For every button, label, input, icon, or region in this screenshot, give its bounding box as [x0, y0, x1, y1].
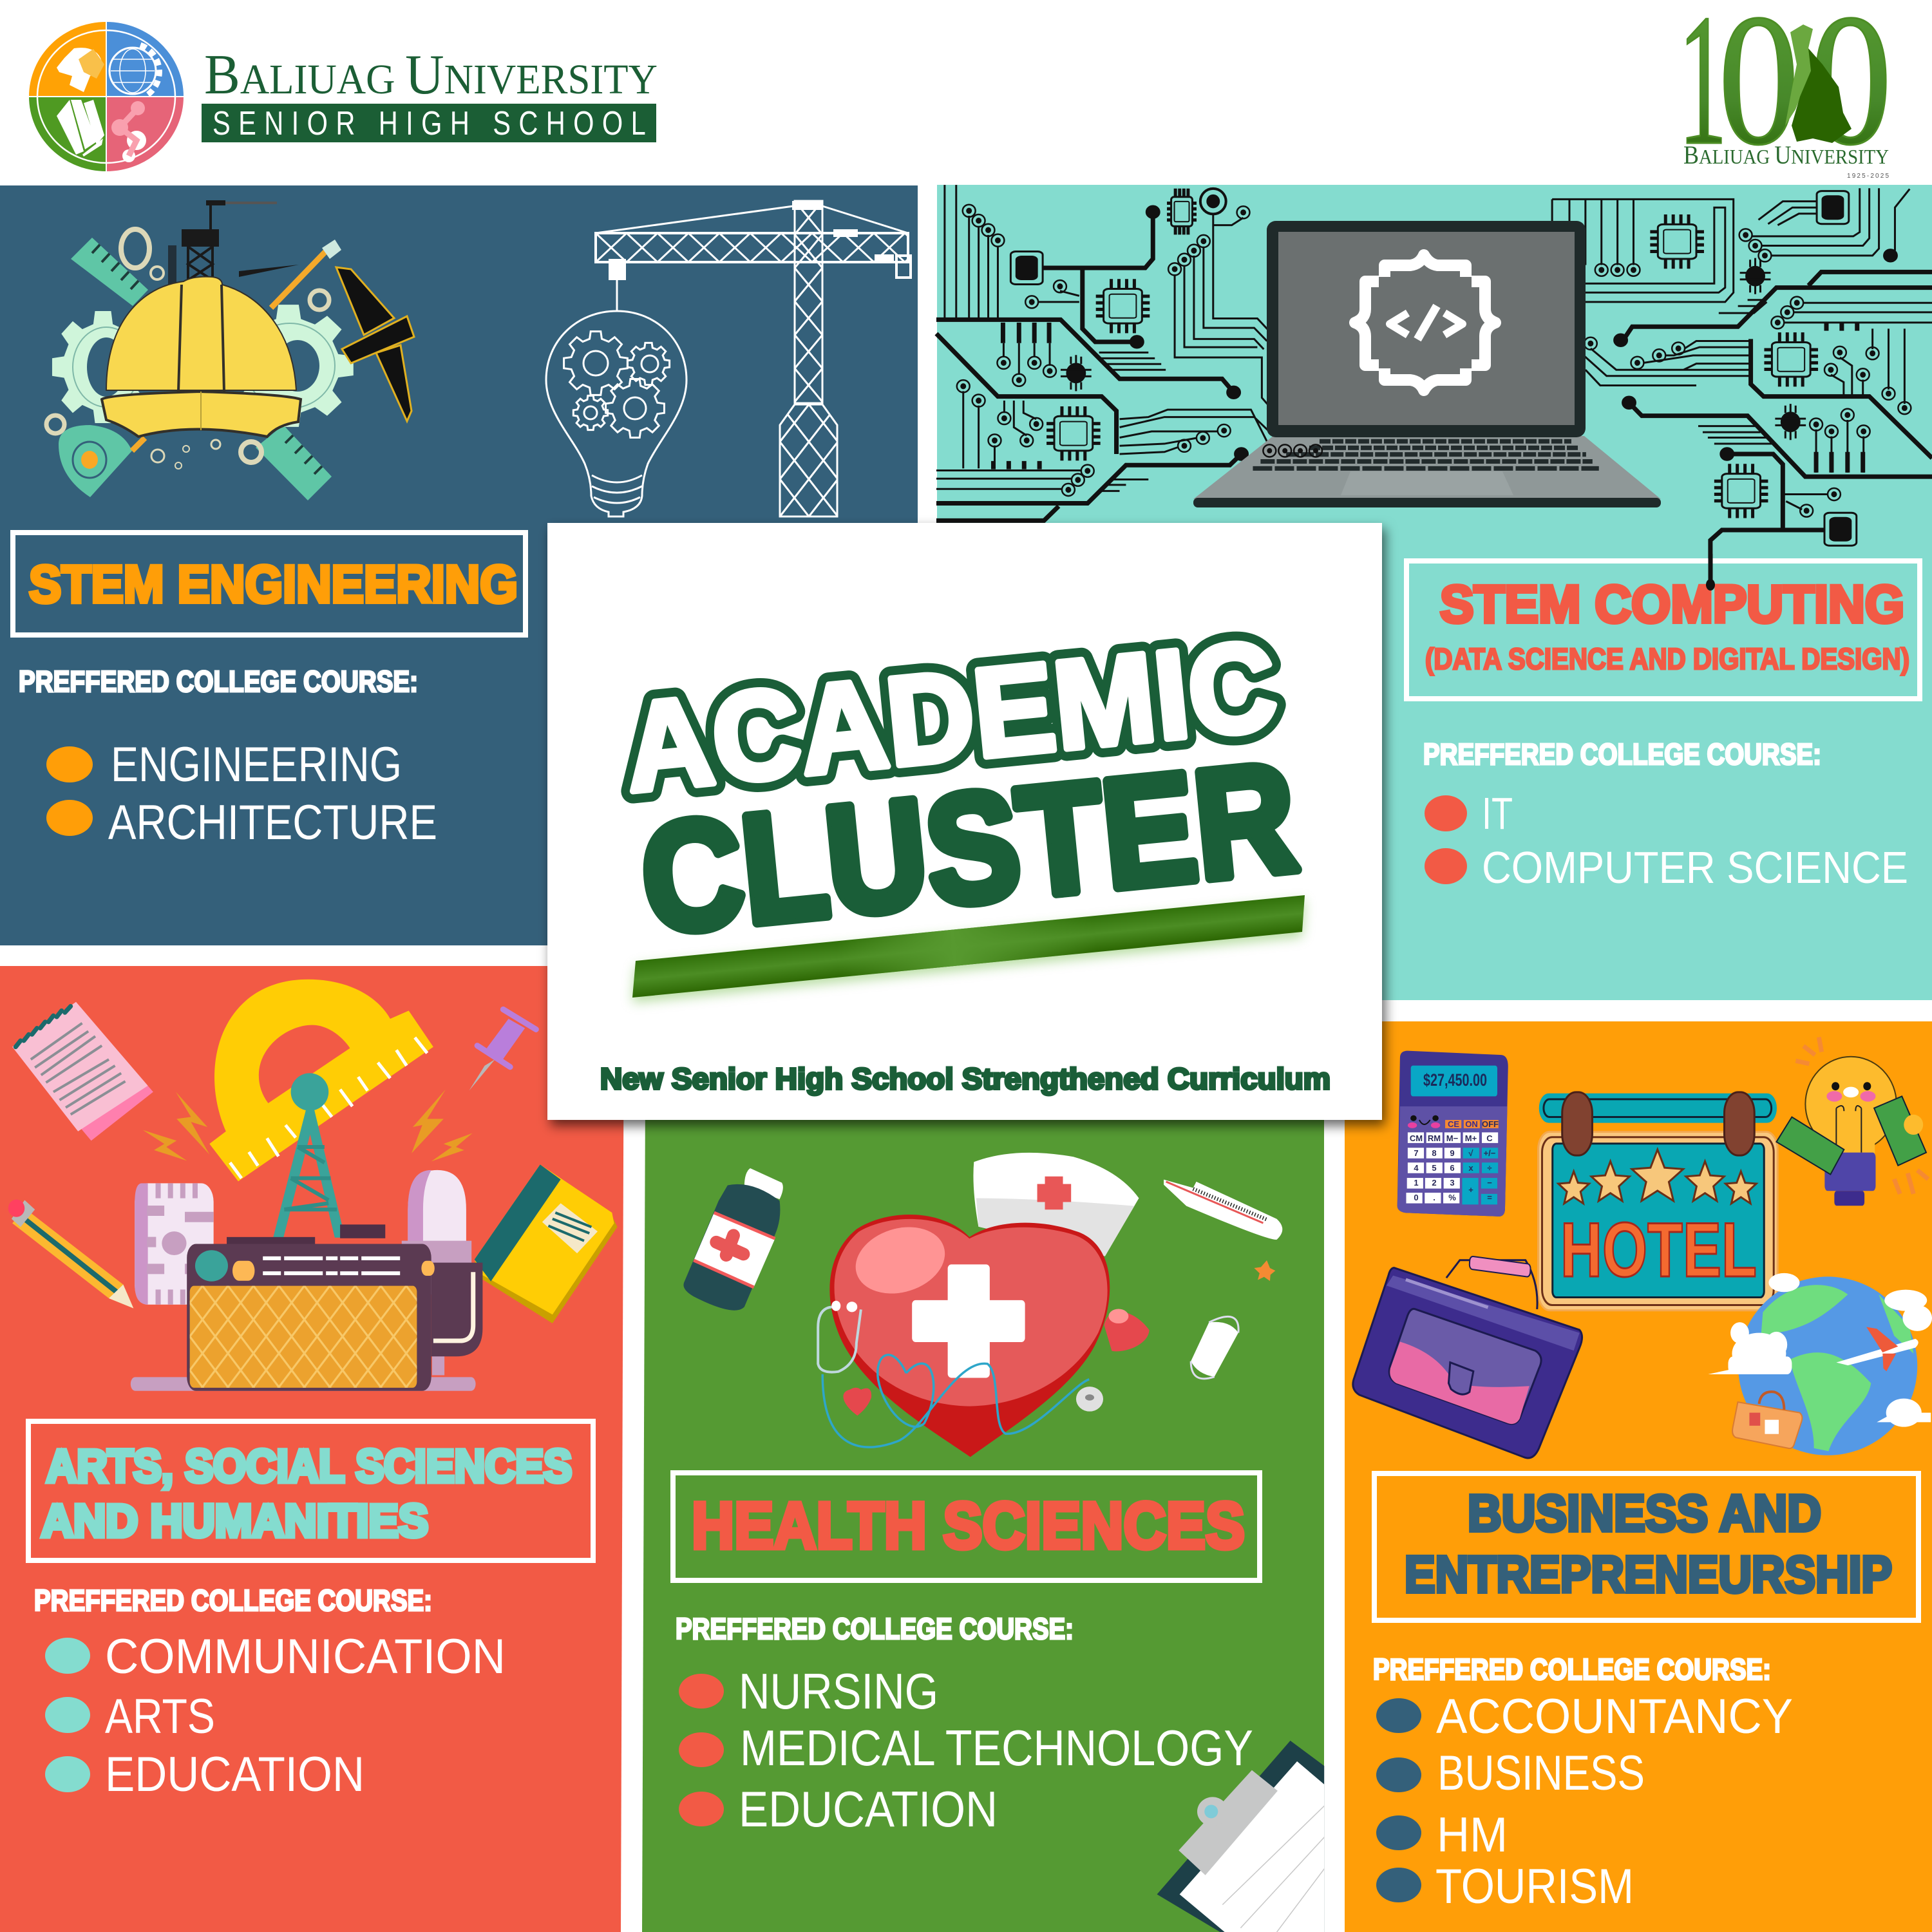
- card background: [547, 523, 1382, 1120]
- calculator key labels: 9: [1450, 1148, 1455, 1158]
- course list: COMMUNICATION: [105, 1629, 506, 1684]
- panel: Business and Entrepreneurship: [1345, 1021, 1932, 1932]
- icon: four-quadrant round emblem: [26, 19, 187, 174]
- calculator key labels: %: [1448, 1193, 1456, 1202]
- circuit trace over heading box: [1706, 554, 1715, 591]
- panel background: [642, 1095, 1324, 1932]
- calculator key labels: x: [1468, 1163, 1473, 1173]
- header: Baliuag University Senior High School logo: [26, 19, 658, 174]
- calculator key labels: M−: [1446, 1133, 1459, 1143]
- calculator key labels: =: [1487, 1193, 1492, 1202]
- calculator readout: $27,450.00: [1423, 1070, 1487, 1090]
- illustration: radio, protractor and school supplies: [8, 980, 618, 1391]
- subheading: preferred course: PREFFERED COLLEGE COURSE:: [19, 665, 418, 698]
- heading box: Arts, Social Sciences and Humanities: ARTS, SOCIAL SCIENCES: [46, 1441, 572, 1492]
- heading box: Health Sciences: HEALTH SCIENCES: [692, 1489, 1245, 1562]
- panel background: [1345, 1021, 1932, 1932]
- anniversary wordmark: BALIUAG UNIVERSITY: [1683, 140, 1889, 169]
- calculator key labels: +: [1468, 1185, 1473, 1195]
- calculator key labels: M+: [1465, 1133, 1477, 1143]
- calculator key labels: 6: [1450, 1163, 1455, 1173]
- calculator key labels: +/−: [1484, 1148, 1496, 1158]
- title: Academic: ACADEMIC: [619, 614, 1282, 819]
- illustration: circuit board traces: [936, 185, 1932, 563]
- calculator key labels: 7: [1414, 1148, 1419, 1158]
- heading box: Health Sciences: [673, 1473, 1260, 1580]
- hotel sign text: HOTEL: [1560, 1207, 1757, 1293]
- calculator key labels: ON: [1465, 1119, 1478, 1129]
- course list: HM: [1437, 1808, 1508, 1862]
- calculator key labels: C: [1486, 1133, 1493, 1143]
- course list: [679, 1663, 1253, 1837]
- course list: [1425, 788, 1908, 893]
- heading box: STEM Engineering: [13, 533, 526, 635]
- heading box: Arts, Social Sciences and Humanities: AND HUMANITIES: [41, 1496, 428, 1547]
- panel background: [0, 185, 918, 945]
- years: 1925-2025: [1847, 173, 1889, 180]
- icon: founder silhouette: [1785, 24, 1852, 143]
- heading box: STEM Computing: STEM COMPUTING: [1440, 575, 1904, 634]
- calculator key labels: CE: [1448, 1119, 1459, 1129]
- course list: [45, 1629, 506, 1802]
- calculator key labels: RM: [1428, 1133, 1441, 1143]
- course list: ACCOUNTANCY: [1436, 1689, 1793, 1744]
- course list: ENGINEERING: [111, 737, 402, 792]
- heading box: Business and Entrepreneurship: [1374, 1473, 1918, 1620]
- calculator key labels: √: [1468, 1148, 1473, 1158]
- calculator key labels: −: [1487, 1178, 1492, 1188]
- heading box: Arts, Social Sciences and Humanities: [28, 1421, 593, 1560]
- panel background: [0, 966, 624, 1932]
- calculator key labels: OFF: [1482, 1119, 1499, 1129]
- illustration: laptop with code icon: [1193, 221, 1661, 507]
- illustration: heart with nurse cap and medical items: [683, 1153, 1329, 1932]
- course list: ARTS: [105, 1689, 215, 1744]
- panel: Health Sciences: [642, 1095, 1329, 1932]
- calculator key labels: ÷: [1487, 1163, 1492, 1173]
- center card: Academic Cluster title: [547, 523, 1382, 1120]
- course list: EDUCATION: [105, 1747, 365, 1802]
- banner: Senior High School: SENIOR HIGH SCHOOL: [213, 104, 646, 142]
- heading box: STEM Computing: [1406, 561, 1920, 699]
- calculator key labels: CM: [1410, 1133, 1423, 1143]
- header: 100 years anniversary logo: [1678, 0, 1892, 184]
- panel background: [937, 185, 1932, 1000]
- title: Academic: ACADEMIC: [619, 614, 1282, 819]
- heading box: Business and Entrepreneurship: BUSINESS AND: [1468, 1484, 1821, 1542]
- heading box: STEM Engineering: STEM ENGINEERING: [29, 555, 518, 614]
- title: Cluster: CLUSTER: [634, 730, 1303, 966]
- course list: EDUCATION: [739, 1781, 998, 1837]
- illustration: hotel sign, calculator, briefcase and globe: [1353, 1037, 1932, 1458]
- illustration: hard hat with tools: [46, 200, 414, 500]
- course list: BUSINESS: [1437, 1746, 1645, 1801]
- illustration: crane lifting lightbulb with gears: [546, 201, 911, 516]
- panel: STEM Computing: [936, 185, 1932, 1000]
- panel: STEM Engineering: [0, 185, 918, 945]
- subtitle: New Senior High School Strengthened Curriculum: [600, 1062, 1331, 1095]
- calculator key labels: 0: [1414, 1193, 1419, 1202]
- calculator key labels: 4: [1414, 1163, 1419, 1173]
- course list: NURSING: [739, 1663, 938, 1719]
- subheading: preferred course: PREFFERED COLLEGE COURSE:: [676, 1612, 1074, 1645]
- calculator key labels: [1410, 1119, 1499, 1202]
- icon: code brackets: [1355, 255, 1495, 390]
- subheading: preferred course: PREFFERED COLLEGE COURSE:: [1423, 737, 1821, 771]
- calculator key labels: 5: [1432, 1163, 1437, 1173]
- calculator key labels: 1: [1414, 1178, 1419, 1188]
- course list: ARCHITECTURE: [108, 795, 437, 850]
- calculator key labels: 2: [1432, 1178, 1437, 1188]
- calculator key labels: 3: [1450, 1178, 1455, 1188]
- subheading: preferred course: PREFFERED COLLEGE COURSE:: [34, 1584, 432, 1617]
- course list: MEDICAL TECHNOLOGY: [740, 1719, 1253, 1776]
- numerals 100: [1678, 0, 1892, 184]
- course list: [46, 737, 437, 850]
- course list: TOURISM: [1435, 1859, 1634, 1914]
- course list: IT: [1482, 788, 1513, 838]
- green underline bar: [632, 895, 1305, 1003]
- course list: [1376, 1689, 1793, 1914]
- subheading: preferred course: PREFFERED COLLEGE COURSE:: [1373, 1653, 1771, 1686]
- panel: Arts, Social Sciences and Humanities: [0, 966, 624, 1932]
- wordmark: Baliuag University: BALIUAG UNIVERSITY: [204, 44, 658, 106]
- calculator key labels: 8: [1432, 1148, 1437, 1158]
- calculator key labels: .: [1433, 1193, 1435, 1202]
